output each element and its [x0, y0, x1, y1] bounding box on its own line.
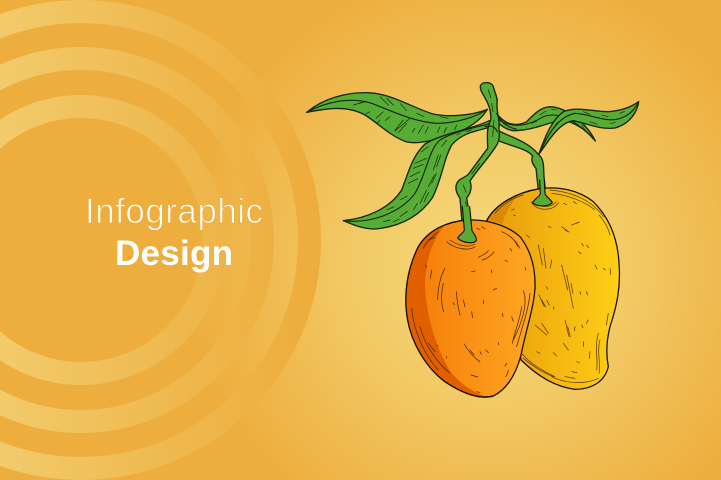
stem: main branch [456, 83, 499, 238]
leaf: right front [539, 102, 639, 155]
stem: right branch [497, 130, 552, 206]
back mango shadow [488, 195, 518, 224]
leaf: lower left [343, 121, 492, 229]
title [85, 192, 263, 273]
mango branch illustration [307, 83, 639, 397]
back calyx and stem [533, 180, 552, 206]
mango: front [406, 207, 535, 397]
mango: back [487, 180, 619, 389]
front mango hatch marks [412, 227, 530, 393]
title line: Infographic: Infographic [85, 192, 263, 231]
leaf: upper left [307, 93, 487, 143]
concentric rings [0, 12, 310, 468]
leaf: right back [497, 107, 595, 141]
front mango crescent shadow [406, 225, 488, 397]
title line: Design: Design [115, 234, 233, 273]
back mango hatch marks [495, 190, 611, 383]
leaves and stems [307, 83, 639, 238]
front calyx and stem [458, 207, 476, 243]
